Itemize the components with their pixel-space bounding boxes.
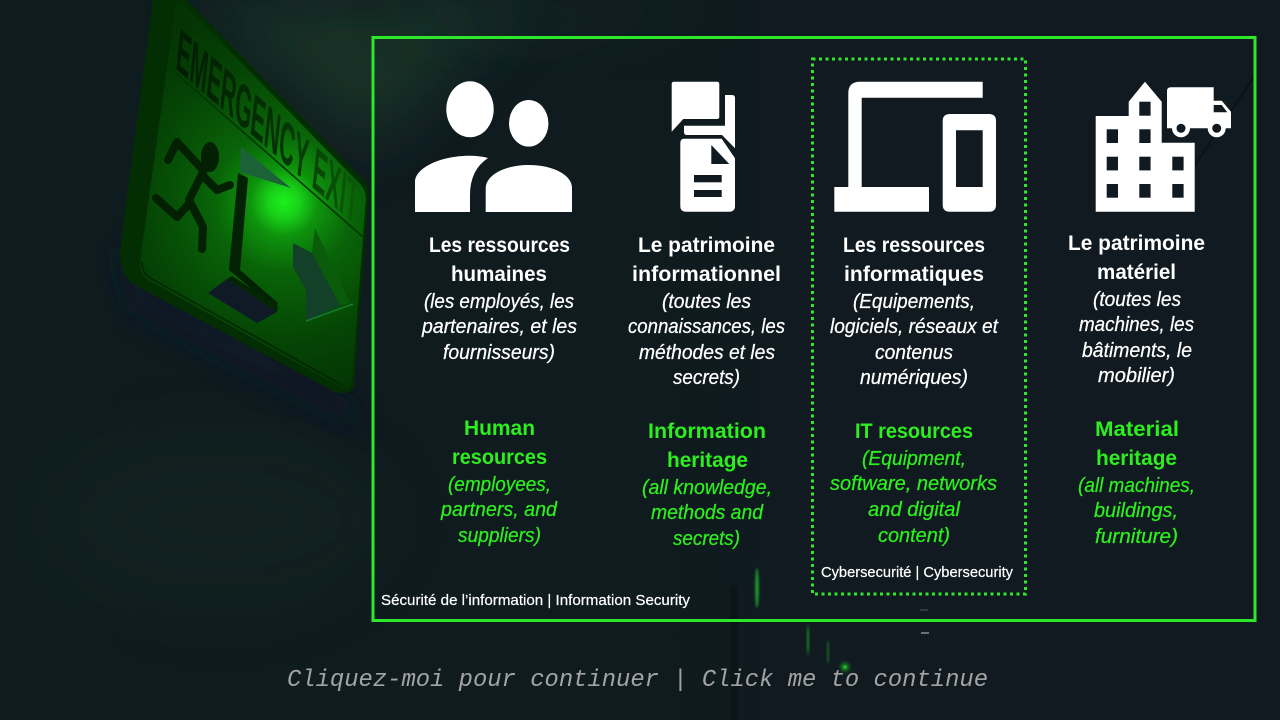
description fr: (toutes les xyxy=(1093,289,1181,311)
heading fr xyxy=(1068,232,1205,284)
icon: building and truck xyxy=(1096,82,1231,212)
description en xyxy=(440,474,558,547)
heading en: resources xyxy=(452,446,547,469)
heading en xyxy=(648,420,766,472)
description en xyxy=(1078,475,1195,548)
heading fr: Le patrimoine xyxy=(1068,232,1205,255)
icon: chat and document xyxy=(672,82,735,212)
heading fr: humaines xyxy=(451,263,547,286)
description en: secrets) xyxy=(673,528,740,550)
description fr: logiciels, réseaux et xyxy=(830,316,999,338)
information security label: Sécurité de l’information | Information Security xyxy=(381,592,690,609)
column: human resources xyxy=(415,81,577,547)
description en: suppliers) xyxy=(458,525,541,547)
door lintel xyxy=(240,147,291,188)
description en: furniture) xyxy=(1095,526,1178,548)
description en: (all knowledge, xyxy=(642,477,772,499)
main frame: information security xyxy=(373,38,1255,620)
heading fr: Les ressources xyxy=(843,234,985,257)
description en: (employees, xyxy=(448,474,551,496)
description fr xyxy=(1079,289,1194,387)
heading fr xyxy=(429,234,570,286)
icon: people xyxy=(415,81,572,212)
description fr: secrets) xyxy=(673,367,740,389)
text: EMERGENCY EXIT xyxy=(174,16,362,238)
door frame xyxy=(229,173,278,308)
description en: partners, and xyxy=(440,499,558,521)
heading fr xyxy=(632,234,781,286)
description en xyxy=(642,477,772,550)
icon: laptop and phone xyxy=(834,82,996,212)
description fr: machines, les xyxy=(1079,314,1194,336)
heading en: Information xyxy=(648,420,766,443)
description fr: partenaires, et les xyxy=(421,316,577,338)
door floor xyxy=(208,279,277,323)
heading en: heritage xyxy=(1096,447,1177,470)
description fr xyxy=(628,291,785,389)
description en: content) xyxy=(878,525,950,547)
column: IT resources xyxy=(821,82,1013,581)
description en xyxy=(830,448,997,547)
description en: buildings, xyxy=(1094,500,1178,522)
heading fr: Les ressources xyxy=(429,234,570,257)
running figure xyxy=(156,142,230,249)
description en: software, networks xyxy=(830,473,997,495)
description fr: bâtiments, le xyxy=(1082,340,1192,362)
sign edge xyxy=(120,0,369,393)
heading en: Material xyxy=(1095,418,1179,441)
description en: methods and xyxy=(651,502,764,524)
arrow highlight xyxy=(306,304,353,321)
heading en: IT resources xyxy=(855,420,973,443)
heading fr: informationnel xyxy=(632,263,781,286)
icon: emergency exit sign xyxy=(120,0,369,393)
heading en: heritage xyxy=(667,449,748,472)
description en: and digital xyxy=(868,499,961,521)
heading fr: informatiques xyxy=(844,263,984,286)
column: material heritage xyxy=(1068,82,1231,548)
heading en xyxy=(452,417,547,469)
sign inner rim xyxy=(142,262,342,385)
description fr: (toutes les xyxy=(662,291,751,313)
heading fr: Le patrimoine xyxy=(638,234,775,257)
description fr: fournisseurs) xyxy=(443,342,555,364)
description fr: (Equipements, xyxy=(853,291,975,313)
description fr: contenus xyxy=(875,342,953,364)
heading fr xyxy=(843,234,985,286)
column: information heritage xyxy=(628,82,785,550)
arrow shadow strip xyxy=(312,228,350,305)
description fr: méthodes et les xyxy=(639,342,775,364)
description en: (Equipment, xyxy=(862,448,966,470)
heading en xyxy=(1095,418,1179,470)
heading fr: matériel xyxy=(1097,261,1176,284)
description fr: (les employés, les xyxy=(424,291,574,313)
description fr: numériques) xyxy=(860,367,968,389)
sign header divider xyxy=(170,68,363,237)
description fr xyxy=(830,291,999,389)
description en: (all machines, xyxy=(1078,475,1195,497)
description fr: mobilier) xyxy=(1098,365,1175,387)
cybersecurity label: Cybersecurité | Cybersecurity xyxy=(821,564,1013,581)
cybersecurity dotted frame xyxy=(812,59,1026,594)
description fr: connaissances, les xyxy=(628,316,785,338)
description fr xyxy=(421,291,577,364)
door threshold xyxy=(227,276,278,312)
sign face xyxy=(140,2,366,389)
exit arrow xyxy=(293,243,340,321)
continue prompt: Cliquez-moi pour continuer | Click me to continue xyxy=(287,667,988,694)
heading en: Human xyxy=(464,417,535,440)
